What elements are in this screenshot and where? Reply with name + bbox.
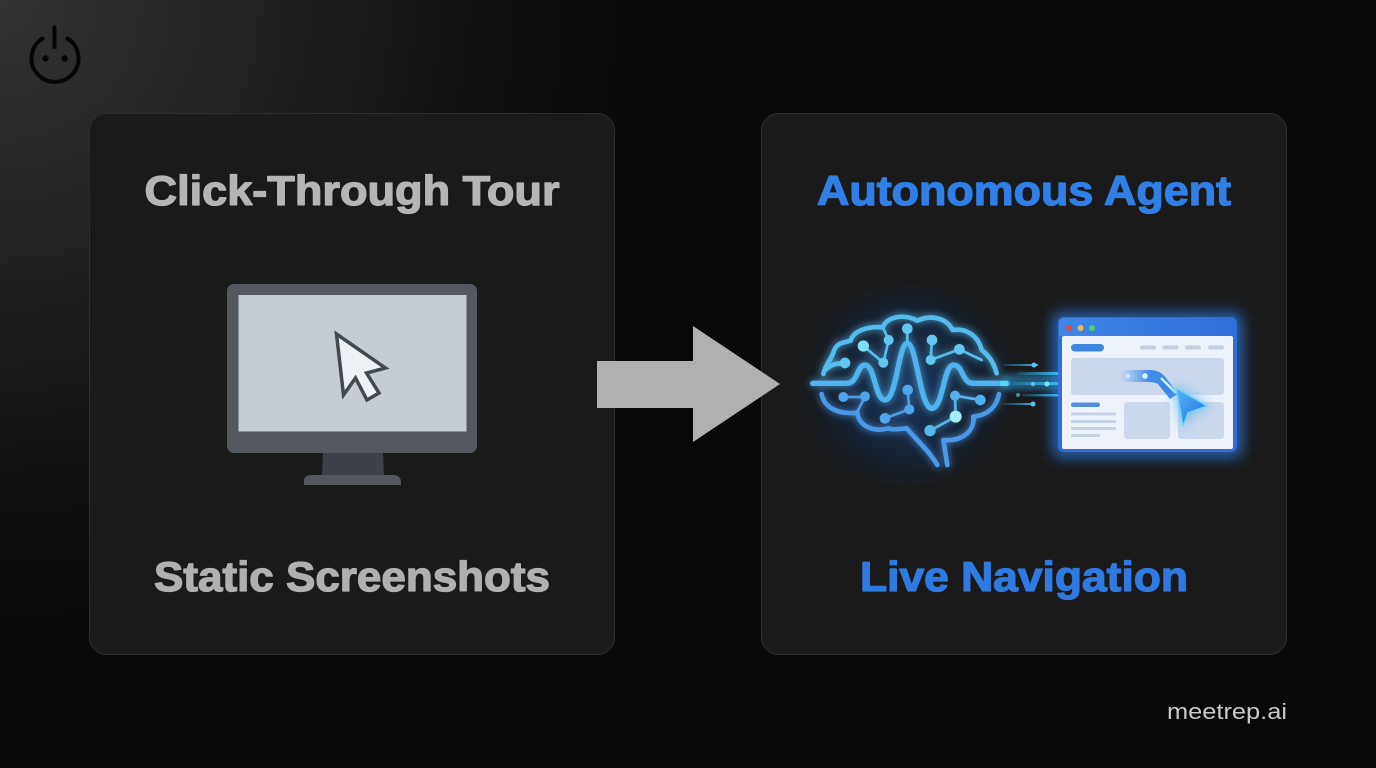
caption: static screenshots: Static Screenshots (154, 553, 550, 600)
heading: autonomous agent: Autonomous Agent (817, 167, 1231, 214)
icon: monitor with cursor (227, 284, 477, 485)
panel: autonomous agent (762, 114, 1286, 654)
heading: click-through tour: Click-Through Tour (144, 167, 560, 214)
icon: glowing agent cursor with trail (1120, 370, 1211, 431)
brand: meetrep.ai: meetrep.ai (1167, 699, 1287, 724)
icon: arrow cursor (336, 334, 386, 400)
data streams (1000, 362, 1060, 406)
icon: circuit brain (813, 317, 1007, 465)
icon: browser window (1058, 317, 1237, 452)
caption: live navigation: Live Navigation (860, 553, 1188, 600)
illustration: brain to browser (783, 285, 1243, 485)
icon: power logo (32, 28, 78, 82)
arrow: transition (597, 326, 780, 442)
panel: click-through tour (90, 114, 614, 654)
